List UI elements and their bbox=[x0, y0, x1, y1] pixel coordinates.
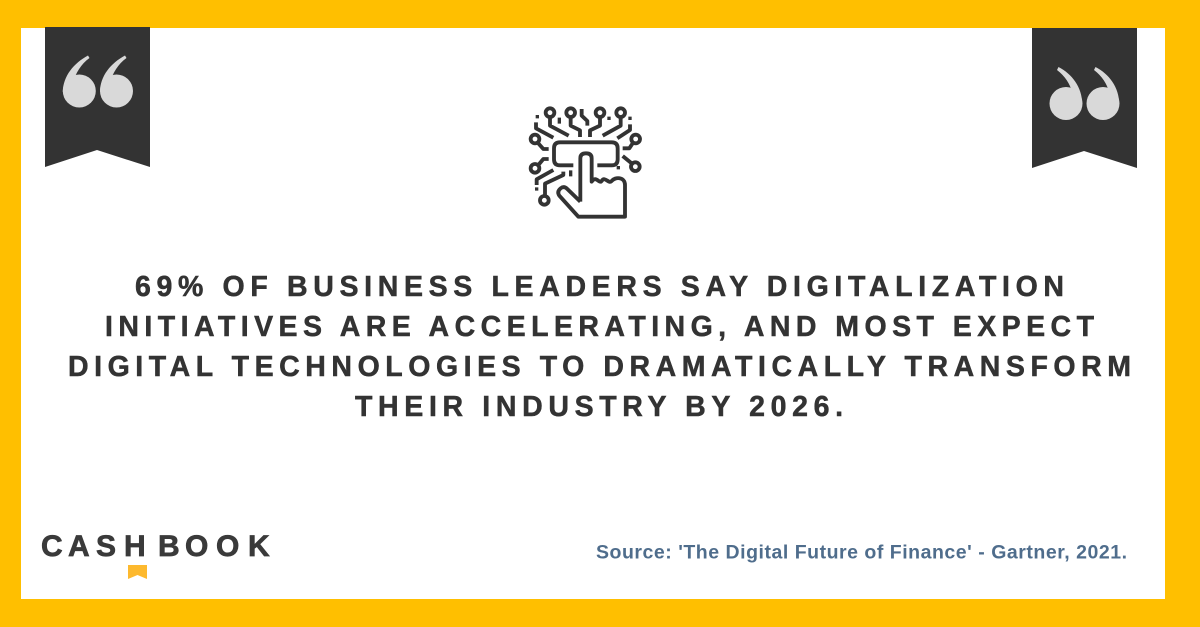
heading: main statistic quote: DIGITAL TECHNOLOGIES TO DRAMATICALLY TRANSFORM bbox=[68, 351, 1131, 383]
heading: main statistic quote: THEIR INDUSTRY BY 2026. bbox=[355, 391, 843, 423]
icon: closing quote ribbon bbox=[1032, 28, 1137, 168]
icon: hand pressing digital button with circuit lines bbox=[531, 108, 640, 217]
logo: Cashbook wordmark and bookmark: CASHBOOK bbox=[41, 530, 270, 563]
heading: main statistic quote: INITIATIVES ARE ACCELERATING, AND MOST EXPECT bbox=[105, 311, 1095, 343]
heading: main statistic quote: 69% OF BUSINESS LEADERS SAY DIGITALIZATION bbox=[135, 271, 1064, 303]
source citation: Source: 'The Digital Future of Finance' - Gartner, 2021. bbox=[596, 542, 1127, 564]
heading: main statistic quote bbox=[68, 271, 1131, 423]
icon: opening quote ribbon bbox=[45, 27, 150, 167]
logo: Cashbook wordmark and bookmark bbox=[41, 530, 270, 579]
